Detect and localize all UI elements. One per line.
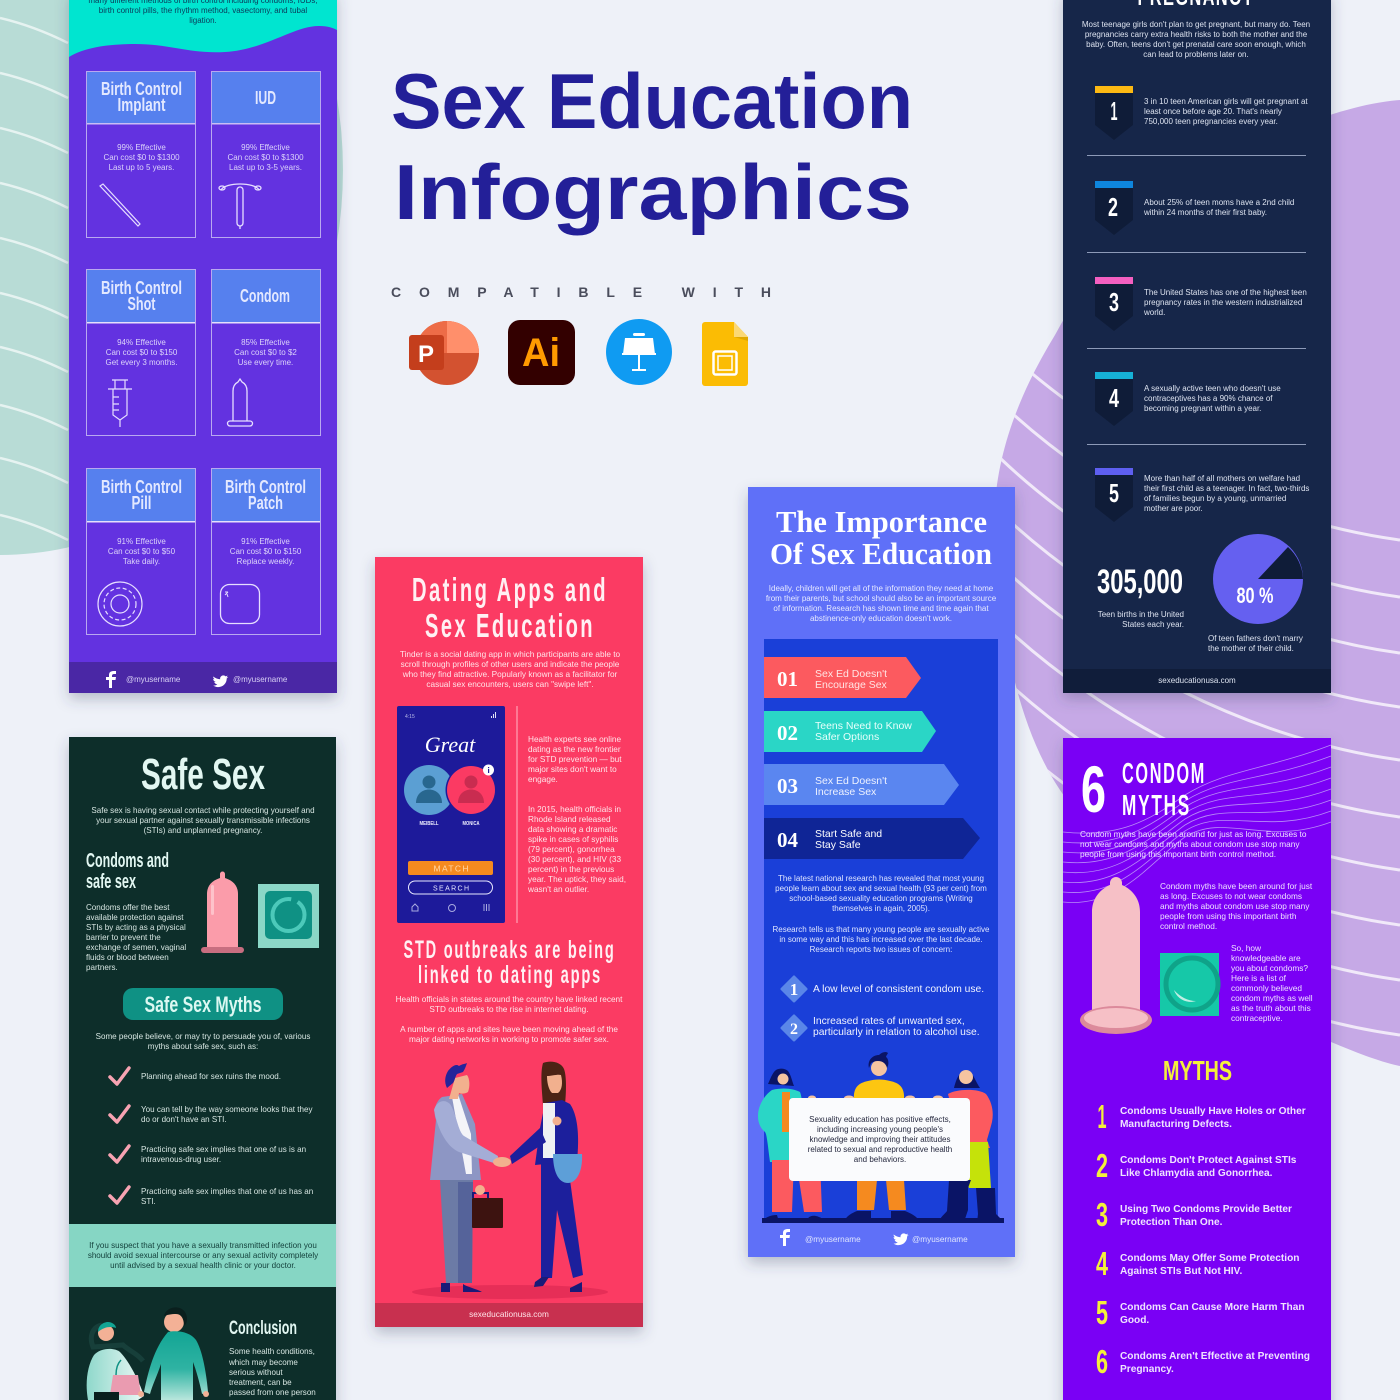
subheading: linked to dating apps — [418, 961, 602, 989]
phone mockup — [397, 706, 505, 923]
intro text — [400, 650, 621, 689]
text block: and myths about condom use stop many — [1160, 901, 1310, 911]
conclusion text — [228, 1347, 316, 1397]
text block: Here is a list of — [1231, 973, 1287, 983]
arrow 01: 01 — [777, 667, 798, 691]
card: condom: Can cost $0 to $2 — [234, 348, 297, 357]
callout band — [69, 1224, 336, 1287]
conclusion text: serious without — [229, 1368, 283, 1377]
text block: people from using this important birth — [1160, 911, 1297, 921]
conclusion text: treatment, can be — [229, 1378, 292, 1387]
condoms text: fluids or blood between — [86, 953, 169, 962]
body text: The latest national research has revealed that most young — [778, 874, 984, 883]
card: birth control shot: Shot — [128, 294, 156, 314]
body text: Health officials in states around the country have linked recent — [396, 995, 623, 1004]
body text — [396, 995, 623, 1044]
fact 4: 4 — [1109, 383, 1119, 413]
checklist: Practicing safe sex implies that one of us has an — [141, 1187, 313, 1196]
intro text: of information. Research has shown time and time again that — [773, 604, 989, 613]
title: MYTHS — [1122, 790, 1191, 822]
fact 2: within 24 months of their first baby. — [1143, 208, 1267, 217]
arrow 04 — [764, 818, 980, 859]
inner blue block — [764, 639, 998, 1222]
subheading: Condoms and — [86, 850, 169, 872]
title: 6 — [1081, 752, 1106, 826]
icon: twitter — [213, 675, 228, 687]
pie chart: 80%: Of teen fathers don't marry — [1208, 634, 1303, 643]
text block: as long. Excuses to not wear condoms — [1160, 891, 1302, 901]
sign card: including increasing young people's — [817, 1125, 943, 1134]
callout band: until advised by a sexual health clinic or your doctor. — [110, 1261, 296, 1270]
body text: themselves in again, 2005). — [832, 904, 930, 913]
icon: facebook — [106, 671, 116, 688]
card: birth control implant: 99% Effective — [117, 143, 166, 152]
heading: Sex Education Infographics: Sex Education — [391, 57, 913, 145]
intro text: pregnancies carry extra health risks to both the mother and the — [1085, 30, 1308, 39]
fact 2: About 25% of teen moms have a 2nd child — [1144, 198, 1294, 207]
left person — [758, 1069, 825, 1222]
arrow 02 — [764, 711, 936, 752]
intro text: who they find attractive. Popularly known as a facilitator for — [402, 670, 618, 679]
icon: PowerPoint: P — [418, 341, 434, 368]
arrow 03: 03 — [777, 774, 798, 798]
woman — [510, 1062, 583, 1292]
checklist: STI. — [141, 1197, 156, 1206]
sign card: knowledge and improving their attitudes — [810, 1135, 950, 1144]
stat: teen births: 305,000 — [1097, 563, 1183, 601]
concern 1: 1 — [790, 980, 798, 999]
card: birth control patch: Replace weekly. — [237, 557, 294, 566]
myth 2 — [1096, 1147, 1297, 1184]
card: IUD: Can cost $0 to $1300 — [227, 153, 304, 162]
footer: sexeducationusa.com — [469, 1310, 549, 1319]
panel: importance of sex education — [748, 487, 1015, 1257]
text block: contraceptive. — [1231, 1013, 1283, 1023]
card: birth control patch: Patch — [248, 493, 283, 513]
fact 1: 1 — [1110, 96, 1118, 126]
card: birth control implant: Implant — [118, 95, 166, 115]
title: Safe Sex — [141, 750, 265, 799]
card: condom — [212, 270, 320, 436]
myth 3 — [1096, 1196, 1292, 1233]
myth 1: Manufacturing Defects. — [1120, 1119, 1232, 1130]
subheading: safe sex — [86, 871, 136, 893]
text block: knowledgeable are — [1231, 953, 1301, 963]
phone mockup: MONICA — [462, 821, 480, 827]
panel: condom myths — [1063, 738, 1331, 1400]
arrow 01: Sex Ed Doesn't — [815, 668, 887, 680]
myth 2: 2 — [1096, 1147, 1108, 1184]
fact 4: A sexually active teen who doesn't use — [1144, 384, 1281, 393]
icon: Keynote — [606, 319, 672, 385]
card: birth control pill: Birth Control — [101, 477, 182, 497]
myths button: Safe Sex Myths — [144, 992, 262, 1017]
body text: people learn about sex and sexual health (93 per cent) from — [775, 884, 987, 893]
body text: major dating networks in working to promote safer sex. — [409, 1035, 609, 1044]
icon: large condom — [1080, 877, 1152, 1034]
condoms text — [86, 903, 186, 972]
arrow 02: Teens Need to Know — [815, 720, 912, 732]
myth 1: Condoms Usually Have Holes or Other — [1120, 1106, 1306, 1117]
subheading — [404, 936, 616, 989]
icon: condom packet — [258, 884, 319, 948]
checklist: intravenous-drug user. — [141, 1155, 221, 1164]
text block: commonly believed — [1231, 983, 1302, 993]
icon: condom — [201, 872, 244, 953]
pie chart: 80% — [1208, 534, 1303, 653]
heading: myths: MYTHS — [1163, 1055, 1232, 1086]
arrow 04: Stay Safe — [815, 839, 861, 851]
card: IUD: 99% Effective — [241, 143, 290, 152]
conclusion heading: Conclusion — [229, 1318, 297, 1339]
myth 2: Condoms Don't Protect Against STIs — [1120, 1155, 1297, 1166]
body text: in some way and this has increased over the last decade. — [779, 935, 983, 944]
footer: social handles: @myusername — [126, 675, 181, 684]
fact 4: contraceptives has a 90% chance of — [1144, 394, 1273, 403]
arrow 03: Sex Ed Doesn't — [815, 775, 887, 787]
body text — [772, 874, 990, 954]
myth 4: 4 — [1096, 1245, 1108, 1282]
text block — [1160, 881, 1313, 931]
intro text: (STIs) and unplanned pregnancy. — [144, 826, 262, 835]
hands on sign — [808, 1096, 943, 1100]
title: Of Sex Education — [770, 536, 992, 571]
title: Sex Education — [425, 607, 595, 644]
side text: spike in cases of syphilis — [528, 835, 618, 844]
myth 5 — [1096, 1294, 1305, 1331]
card: birth control shot: Get every 3 months. — [105, 358, 178, 367]
concern 2: 2 — [790, 1021, 798, 1038]
side text: dating as the new frontier — [528, 745, 621, 754]
footer: social handles: @myusername — [805, 1235, 861, 1244]
fact 1: 750,000 teen pregnancies every year. — [1144, 117, 1278, 126]
side text: (30 percent), and HIV (33 — [528, 855, 622, 864]
concern 2: particularly in relation to alcohol use. — [813, 1027, 980, 1038]
illustration: people holding sign — [758, 1052, 1004, 1223]
icon: PowerPoint — [409, 321, 479, 385]
title: The Importance — [776, 504, 987, 539]
intro text: Most teenage girls don't plan to get pregnant, but many do. Teen — [1082, 20, 1310, 29]
fact 4 — [1095, 372, 1281, 426]
icon: Google Slides — [702, 322, 748, 386]
illustration: couple — [87, 1307, 209, 1400]
conclusion text: Some health conditions, — [229, 1347, 315, 1356]
side text: for STD prevention — but — [528, 755, 622, 764]
arrow 03 — [764, 764, 959, 805]
title: Dating Apps and — [412, 571, 608, 608]
myths intro: myths about safe sex, such as: — [148, 1042, 258, 1051]
body text: Research reports two issues of concern: — [810, 945, 952, 954]
arrow 01 — [764, 657, 921, 698]
checklist: do or don't have an STI. — [141, 1115, 227, 1124]
footer: social handles: @myusername — [233, 675, 288, 684]
myth 3: 3 — [1096, 1196, 1108, 1233]
panel: safe sex — [69, 737, 336, 1400]
callout band: If you suspect that you have a sexually transmitted infection you — [89, 1241, 317, 1250]
intro text: Tinder is a social dating app in which participants are able to — [400, 650, 621, 659]
card: IUD: IUD — [255, 88, 276, 108]
myth 4: Against STIs But Not HIV. — [1120, 1266, 1242, 1277]
text block: So, how — [1231, 943, 1262, 953]
footer: social handles — [780, 1229, 968, 1246]
side text: In 2015, health officials in — [528, 805, 621, 814]
card: birth control patch: Birth Control — [225, 477, 306, 497]
fact 3: pregnancy rates in the western industrialized — [1144, 298, 1302, 307]
conclusion text: passed from one person — [229, 1388, 316, 1397]
fact 1: least once before age 20. That's nearly — [1144, 107, 1282, 116]
card: condom: 85% Effective — [241, 338, 290, 347]
card: birth control pill: Can cost $0 to $50 — [108, 547, 176, 556]
text block: Condom myths have been around for just — [1160, 881, 1313, 891]
middle person — [844, 1052, 920, 1222]
footer: social handles — [69, 662, 337, 693]
myth 6 — [1096, 1343, 1310, 1380]
text block: control method. — [1160, 921, 1217, 931]
footer — [375, 1303, 643, 1327]
arrow 02: Safer Options — [815, 731, 879, 743]
intro text: birth control pills, the rhythm method, vasectomy, and tubal — [99, 6, 307, 15]
callout band: should avoid sexual intercourse or any sexual activity completely — [88, 1251, 318, 1260]
intro text: ligation. — [189, 16, 217, 25]
pie chart: 80%: 80 % — [1236, 583, 1274, 608]
side text: Health experts see online — [528, 735, 622, 744]
intro text: from their parents, but school should also be an important source — [766, 594, 997, 603]
concern 1 — [782, 977, 984, 1001]
heading: Sex Education Infographics — [391, 57, 913, 236]
intro text: people from using this important birth control method. — [1080, 849, 1276, 859]
icon: twitter — [894, 1233, 909, 1245]
card: birth control patch — [212, 468, 320, 634]
body text: A number of apps and sites have been moving ahead of the — [400, 1025, 618, 1034]
card: birth control implant: Can cost $0 to $1300 — [103, 153, 180, 162]
body text: STD outbreaks to the rise in internet dating. — [429, 1005, 589, 1014]
myths intro — [96, 1032, 310, 1051]
condoms text: partners. — [86, 963, 118, 972]
intro text: not wear condoms and myths about condom use stop many — [1080, 839, 1300, 849]
title: CONDOM — [1122, 758, 1206, 790]
myth 2: Like Chlamydia and Gonorrhea. — [1120, 1168, 1273, 1179]
intro text: Condom myths have been around for just as long. Excuses to — [1080, 829, 1307, 839]
stat: teen births: Teen births in the United — [1098, 610, 1184, 619]
checklist: Planning ahead for sex ruins the mood. — [141, 1072, 281, 1081]
condoms text: barrier to prevent the — [86, 933, 161, 942]
checklist — [110, 1068, 313, 1206]
intro text — [1082, 20, 1310, 59]
intro text — [1080, 829, 1307, 859]
myth 1 — [1098, 1098, 1306, 1135]
myth 3: Using Two Condoms Provide Better — [1120, 1204, 1292, 1215]
side text: major sites don't want to — [528, 765, 617, 774]
icon: Illustrator — [508, 320, 575, 385]
intro text: Ideally, children will get all of the information they need at home — [769, 584, 994, 593]
side text: Rhode Island released — [528, 815, 611, 824]
intro text: scroll through profiles of other users and indicate the people — [401, 660, 620, 669]
title — [412, 571, 608, 644]
side text: engage. — [528, 775, 558, 784]
condoms text: available protection against — [86, 913, 184, 922]
intro text — [88, 0, 318, 25]
stat: teen births: States each year. — [1122, 620, 1184, 629]
card: IUD: Last up to 3-5 years. — [229, 163, 302, 172]
sign card — [789, 1098, 970, 1181]
sign card: and behaviors. — [854, 1155, 906, 1164]
fact 2 — [1095, 181, 1294, 235]
card: birth control shot: 94% Effective — [117, 338, 166, 347]
fact 1 — [1095, 86, 1308, 140]
card: birth control shot: Can cost $0 to $150 — [106, 348, 178, 357]
man — [430, 1063, 503, 1292]
panel: birth control methods — [69, 0, 337, 693]
label: compatible with: COMPATIBLE WITH — [391, 284, 771, 300]
card: birth control implant: Birth Control — [101, 79, 182, 99]
card: birth control patch: 91% Effective — [241, 537, 290, 546]
fact 5 — [1095, 468, 1309, 522]
intro text: casual sex encounters, users can "swipe left". — [426, 680, 594, 689]
pie chart: 80%: the mother of their child. — [1208, 644, 1294, 653]
myth 4: Condoms May Offer Some Protection — [1120, 1253, 1299, 1264]
side text — [527, 735, 626, 894]
phone mockup: MATCH — [434, 864, 468, 874]
card: birth control pill: Take daily. — [123, 557, 160, 566]
intro text: Safe sex is having sexual contact while protecting yourself and — [91, 806, 315, 815]
fact 4: becoming pregnant within a year. — [1144, 404, 1261, 413]
fact 1: 3 in 10 teen American girls will get pregnant at — [1144, 97, 1308, 106]
sign card: related to sexual and reproductive health — [808, 1145, 952, 1154]
stat: teen births — [1097, 563, 1184, 629]
intro text: can lead to problems later on. — [1143, 50, 1249, 59]
side text: wasn't an outlier. — [527, 885, 589, 894]
footer — [1063, 669, 1331, 693]
fact 3: The United States has one of the highest teen — [1144, 288, 1307, 297]
icon: Illustrator: Ai — [522, 331, 560, 375]
footer: sexeducationusa.com — [1158, 676, 1236, 685]
heading: Sex Education Infographics: Infographics — [394, 148, 912, 236]
card: birth control shot — [86, 270, 196, 436]
body text: school-based sexuality education programs (Writing — [789, 894, 973, 903]
icon: condom packet — [1160, 953, 1219, 1016]
text block: you about condoms? — [1231, 963, 1308, 973]
card: birth control implant — [86, 72, 196, 238]
fact 5: More than half of all mothers on welfare had — [1144, 474, 1300, 483]
intro text: baby. Often, teens don't get prenatal care soon enough, which — [1086, 40, 1306, 49]
intro text — [91, 806, 315, 835]
card: birth control pill: Pill — [132, 493, 152, 513]
card: IUD — [212, 72, 320, 238]
sign card: Sexuality education has positive effects, — [809, 1115, 951, 1124]
card: birth control implant: Last up to 5 years. — [109, 163, 174, 172]
myth 5: Condoms Can Cause More Harm Than — [1120, 1302, 1305, 1313]
fact 5: 5 — [1109, 478, 1119, 508]
myth 3: Protection Than One. — [1120, 1217, 1223, 1228]
fact 3 — [1095, 277, 1307, 331]
card: birth control patch: Can cost $0 to $150 — [230, 547, 302, 556]
footer: social handles: @myusername — [912, 1235, 968, 1244]
arrow 01: Encourage Sex — [815, 679, 888, 691]
arrow 03: Increase Sex — [815, 786, 877, 798]
title — [1081, 752, 1206, 826]
intro text: abstinence-only education doesn't work. — [810, 614, 952, 623]
myth 6: 6 — [1096, 1343, 1108, 1380]
concern 1: A low level of consistent condom use. — [813, 984, 984, 995]
subheading — [86, 850, 169, 893]
myth 5: 5 — [1096, 1294, 1108, 1331]
concern 2 — [782, 1016, 980, 1040]
condoms text: STIs by acting as a physical — [86, 923, 186, 932]
clasped hands — [493, 1157, 511, 1167]
fact 2: 2 — [1108, 192, 1118, 222]
text block: condom myths as well — [1231, 993, 1313, 1003]
myth 6: Condoms Aren't Effective at Preventing — [1120, 1351, 1310, 1362]
intro text — [766, 584, 997, 623]
subheading: STD outbreaks are being — [404, 936, 616, 964]
intro text: your sexual partner against sexually transmissible infections — [96, 816, 310, 825]
card: condom: Use every time. — [238, 358, 293, 367]
card: birth control pill: 91% Effective — [117, 537, 166, 546]
fact 5: mother are poor. — [1144, 504, 1203, 513]
text block — [1231, 943, 1313, 1023]
illustration: handshake — [412, 1062, 608, 1299]
conclusion text: which may become — [228, 1358, 298, 1367]
body text: Research tells us that many young people are sexually active — [772, 925, 990, 934]
card: condom: Condom — [240, 286, 290, 306]
fact 5: their first child as a teenager. In fact, two-thirds — [1144, 484, 1309, 493]
checklist: You can tell by the way someone looks that they — [141, 1105, 312, 1114]
side text: (79 percent), gonorrhea — [528, 845, 615, 854]
panel: teen pregnancy — [1063, 0, 1331, 693]
arrow 02: 02 — [777, 721, 798, 745]
phone mockup: 4:15 — [405, 714, 415, 720]
card: birth control pill — [86, 468, 196, 634]
checklist: Practicing safe sex implies that one of us is an — [141, 1145, 306, 1154]
title — [770, 504, 992, 571]
phone mockup: Great — [425, 732, 476, 757]
icon: facebook — [780, 1229, 790, 1246]
phone mockup: SEARCH — [433, 886, 469, 892]
side text: percent) in the previous — [528, 865, 614, 874]
text block: as the truth about this — [1231, 1003, 1311, 1013]
top wave banner — [69, 0, 337, 57]
panel: dating apps — [375, 557, 643, 1327]
myths button — [123, 988, 283, 1020]
arrow 04: 04 — [777, 828, 798, 852]
side text: data showing a dramatic — [528, 825, 617, 834]
myth 4 — [1096, 1245, 1299, 1282]
fact 3: world. — [1143, 308, 1165, 317]
fact 3: 3 — [1109, 287, 1119, 317]
myths intro: Some people believe, or may try to persuade you of, various — [96, 1032, 310, 1041]
condoms text: Condoms offer the best — [86, 903, 170, 912]
myth 1: 1 — [1098, 1098, 1106, 1135]
arrow 04: Start Safe and — [815, 828, 882, 840]
condoms text: exchange of semen, vaginal — [86, 943, 186, 952]
fact 5: of families begun by a young, unmarried — [1144, 494, 1286, 503]
phone mockup: MEIBELL — [420, 821, 439, 827]
side text: year. The uptick, they said, — [528, 875, 626, 884]
right person — [939, 1070, 1004, 1222]
concern 2: Increased rates of unwanted sex, — [813, 1016, 965, 1027]
myth 6: Pregnancy. — [1120, 1364, 1174, 1375]
myth 5: Good. — [1120, 1315, 1149, 1326]
card: birth control shot: Birth Control — [101, 278, 182, 298]
